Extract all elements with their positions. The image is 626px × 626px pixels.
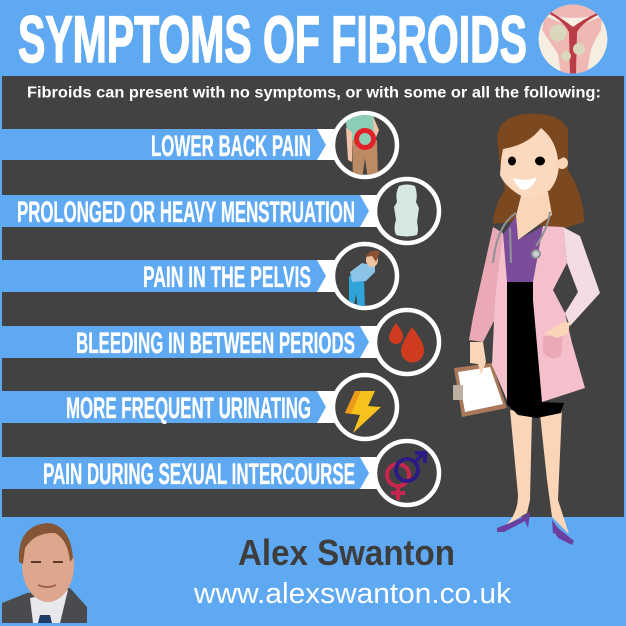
portrait: Alex Swanton [2,523,87,623]
right sleeve [563,227,600,326]
coat left panel [492,233,507,400]
eyes [508,156,516,166]
icon: back pain [346,115,379,175]
symptom: lower back pain: LOWER BACK PAIN [151,130,311,163]
hair top [497,114,568,160]
symptom: lower back pain [0,112,397,180]
hand left [470,342,486,375]
purple top [503,216,543,282]
icon: gender symbols [387,453,425,500]
author name: Alex Swanton [238,532,455,573]
symptom: more frequent urinating: MORE FREQUENT URINATING [66,392,311,425]
icon: lightning bolt [345,391,381,433]
black dress [506,282,564,418]
symptom: bleeding in between periods: BLEEDING IN BETWEEN PERIODS [76,327,355,360]
icon: sanitary pad [394,184,419,236]
illustration: doctor [453,114,600,545]
face [500,122,559,198]
symptom: pain in the pelvis [0,244,397,310]
website: www.alexswanton.co.uk [193,578,512,610]
pocket [543,333,563,358]
symptom: prolonged or heavy menstruation [0,179,439,243]
symptom: bleeding in between periods [0,310,439,374]
symptom: prolonged or heavy menstruation: PROLONGED OR HEAVY MENSTRUATION [17,196,355,229]
symptom: pain in the pelvis: PAIN IN THE PELVIS [143,261,311,294]
symptom: more frequent urinating [0,375,397,439]
intro text: Fibroids can present with no symptoms, or with some or all the following: [27,84,601,102]
icon: bent-over woman [349,250,380,310]
coat left sleeve [469,227,505,342]
clipboard [453,363,507,417]
icon: blood drops [389,323,424,362]
legs [505,410,532,526]
shoes [497,512,530,532]
symptom: pain during sexual intercourse [0,441,439,505]
hair back [493,114,584,228]
panel: symptoms background [2,76,624,517]
icon: uterus with fibroids [538,0,608,74]
smile [513,177,537,190]
right hand [545,322,570,338]
symptom: pain during sexual intercourse: PAIN DURING SEXUAL INTERCOURSE [43,458,355,491]
neck [516,192,552,240]
coat right panel [533,226,585,402]
stethoscope [493,212,550,263]
